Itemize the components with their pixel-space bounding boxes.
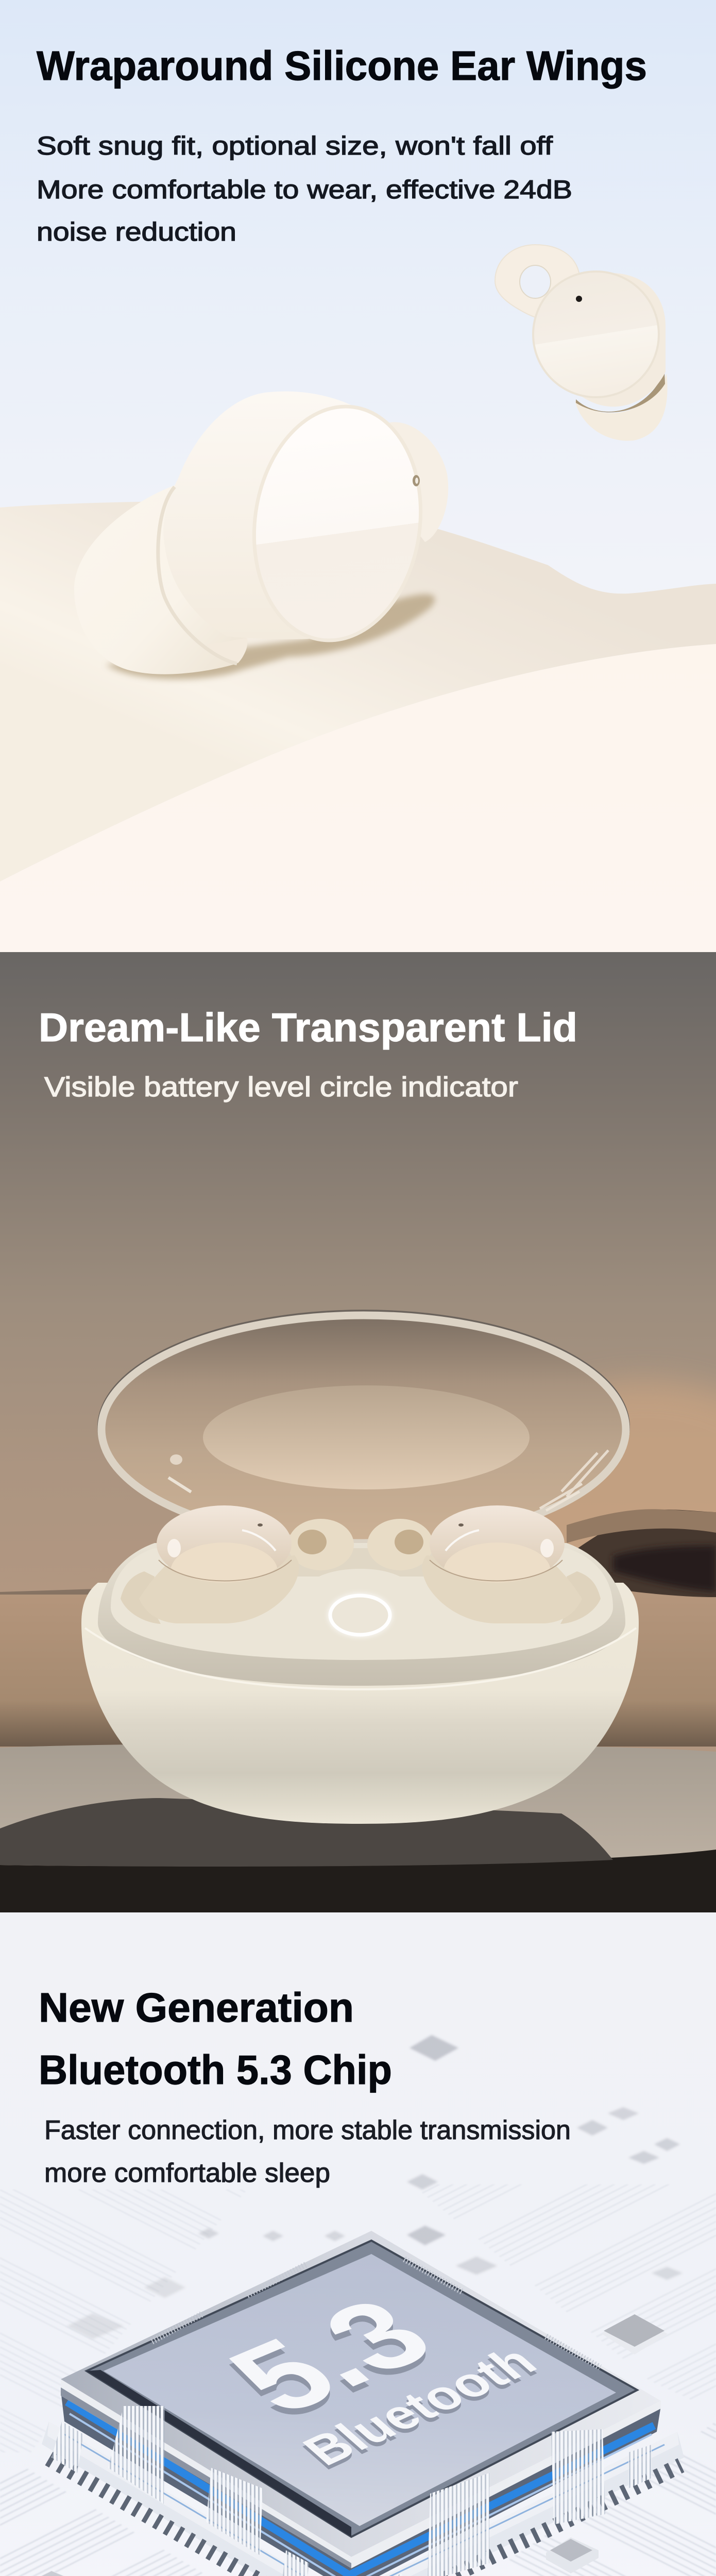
base front: [47, 2421, 679, 2576]
case lid: [97, 1310, 630, 1545]
heading: New Generation: [39, 1985, 354, 2030]
wire bundles: [108, 2406, 165, 2504]
panel: wraparound silicone ear wings: [0, 43, 716, 952]
top silver layer: [61, 2231, 661, 2557]
silk wave lower area: [0, 644, 716, 952]
mic hole: [413, 475, 420, 486]
board chip, right: [602, 2314, 668, 2354]
sand ground: [0, 1592, 716, 1747]
bluetooth label shadow: Bluetooth: [291, 2342, 548, 2478]
chip: [42, 2231, 684, 2576]
ear tip: [74, 485, 247, 674]
tray lip: [98, 1543, 625, 1686]
left earbud in case: [121, 1505, 354, 1624]
panel: dream-like transparent lid: [0, 952, 716, 1912]
horizon left: [0, 1588, 180, 1595]
tip: [575, 374, 668, 441]
frame pins: [152, 2259, 600, 2367]
shadow under large earbud: [106, 594, 435, 679]
body: [541, 273, 666, 406]
tip seam: [158, 487, 237, 664]
silk wave band: [0, 500, 716, 882]
battery ring indicator: [330, 1596, 390, 1635]
warm glow: [479, 1381, 716, 1607]
case base: [81, 1543, 639, 1824]
heading: Bluetooth 5.3 Chip: [39, 2047, 392, 2093]
base plate: [42, 2421, 684, 2576]
small floating earbud: [495, 245, 668, 441]
back wall behind buds: [258, 1548, 464, 1577]
panel: new generation bluetooth chip: [0, 1912, 716, 2576]
mid layer: [61, 2391, 661, 2576]
heading: Wraparound Silicone Ear Wings: [37, 43, 647, 89]
description text: Soft snug fit, optional size, won't fall off: [37, 131, 553, 160]
ear wing: [386, 422, 448, 542]
description text: [44, 2115, 571, 2188]
description text: [37, 131, 572, 246]
main body: [163, 392, 402, 639]
dusk sky backdrop: [0, 952, 716, 1912]
pins left: [49, 2459, 330, 2576]
mic hole: [576, 296, 582, 302]
dark foreground: [0, 1850, 716, 1912]
heading: Dream-Like Transparent Lid: [39, 1005, 577, 1050]
description text: noise reduction: [37, 217, 236, 246]
table shadow: [0, 1798, 613, 1867]
circuit traces: [0, 2184, 716, 2576]
faceplate: [533, 272, 659, 397]
background: [0, 1912, 716, 2576]
blurred components on board: [67, 2035, 683, 2339]
background: section 1 sky: [0, 0, 716, 952]
heading: [39, 1985, 392, 2093]
description text: more comfortable sleep: [44, 2158, 330, 2188]
lid window: [203, 1385, 530, 1489]
bluetooth label: Bluetooth: [291, 2337, 548, 2474]
faceplate: [240, 396, 435, 651]
table top: [0, 1743, 716, 1867]
centre hump: [247, 1569, 479, 1654]
description text: Faster connection, more stable transmission: [44, 2115, 571, 2145]
5.3 label shadow: 5.3: [201, 2285, 459, 2439]
dark hills on the right: [567, 1510, 716, 1597]
light plate: [104, 2254, 616, 2526]
wing ring: [495, 245, 579, 320]
seam highlight: [85, 1628, 636, 1689]
5.3 label: 5.3: [201, 2279, 459, 2433]
frame: [87, 2241, 637, 2537]
small parts lower left: [0, 2571, 79, 2576]
shell: [81, 1583, 639, 1824]
reflections: [170, 1454, 182, 1465]
pins right: [355, 2465, 681, 2576]
description text: More comfortable to wear, effective 24dB: [37, 175, 572, 204]
board chip, lower right: [546, 2537, 599, 2573]
description text: Visible battery level circle indicator: [44, 1072, 518, 1103]
right earbud in case: [367, 1505, 601, 1624]
platform: [111, 1548, 613, 1660]
large earbud: [74, 392, 448, 674]
